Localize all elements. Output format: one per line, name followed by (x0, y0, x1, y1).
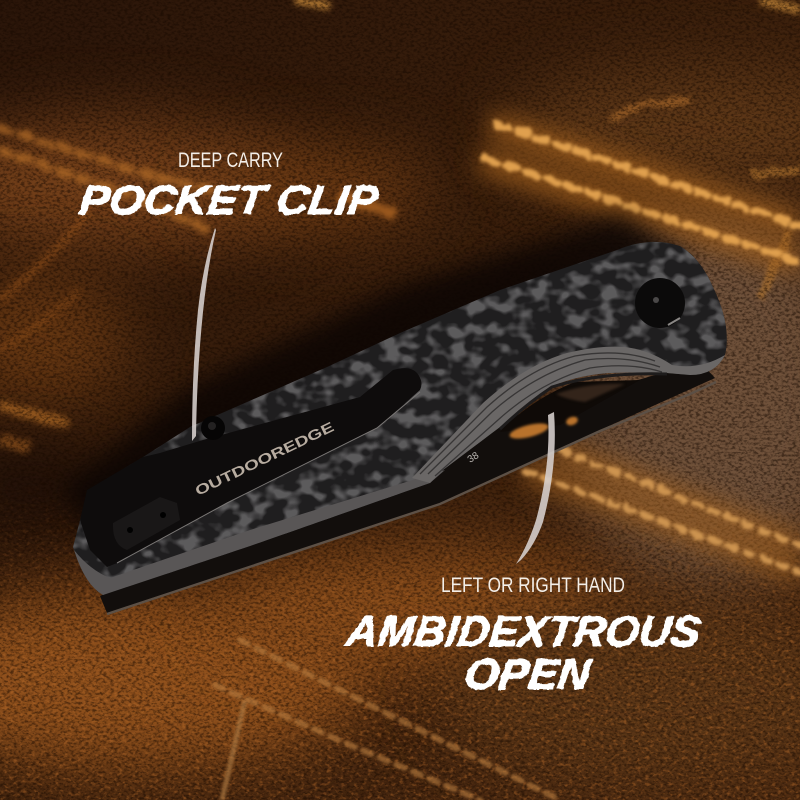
subheading: DEEP CARRY (178, 149, 283, 172)
heading line two: OPEN (462, 651, 594, 699)
callout: pocket clip (77, 149, 382, 223)
blade stamp: 38 (466, 450, 481, 466)
subheading: LEFT OR RIGHT HAND (441, 574, 625, 597)
contoured finger groove (412, 347, 725, 483)
leader line: pocket clip (192, 228, 216, 441)
leader line: ambidextrous open (516, 412, 555, 564)
callout: ambidextrous open (343, 574, 703, 699)
handle scale (73, 242, 727, 595)
heading: AMBIDEXTROUS (343, 608, 703, 656)
stitching: lower right (525, 450, 800, 572)
pivot screw (635, 278, 685, 328)
clip logo: OUTDOOREDGE (192, 418, 336, 499)
knife (73, 242, 727, 615)
pocket clip (80, 368, 421, 567)
stitching: bottom (215, 640, 560, 800)
heading: POCKET CLIP (77, 177, 382, 223)
clip screw (201, 416, 225, 440)
knife shadow (60, 215, 690, 570)
handle lower bevel (74, 470, 445, 595)
stitching: upper right (480, 124, 800, 262)
stitching: upper left (0, 128, 395, 228)
blade window (500, 380, 640, 432)
blade and lower liner (100, 362, 715, 613)
